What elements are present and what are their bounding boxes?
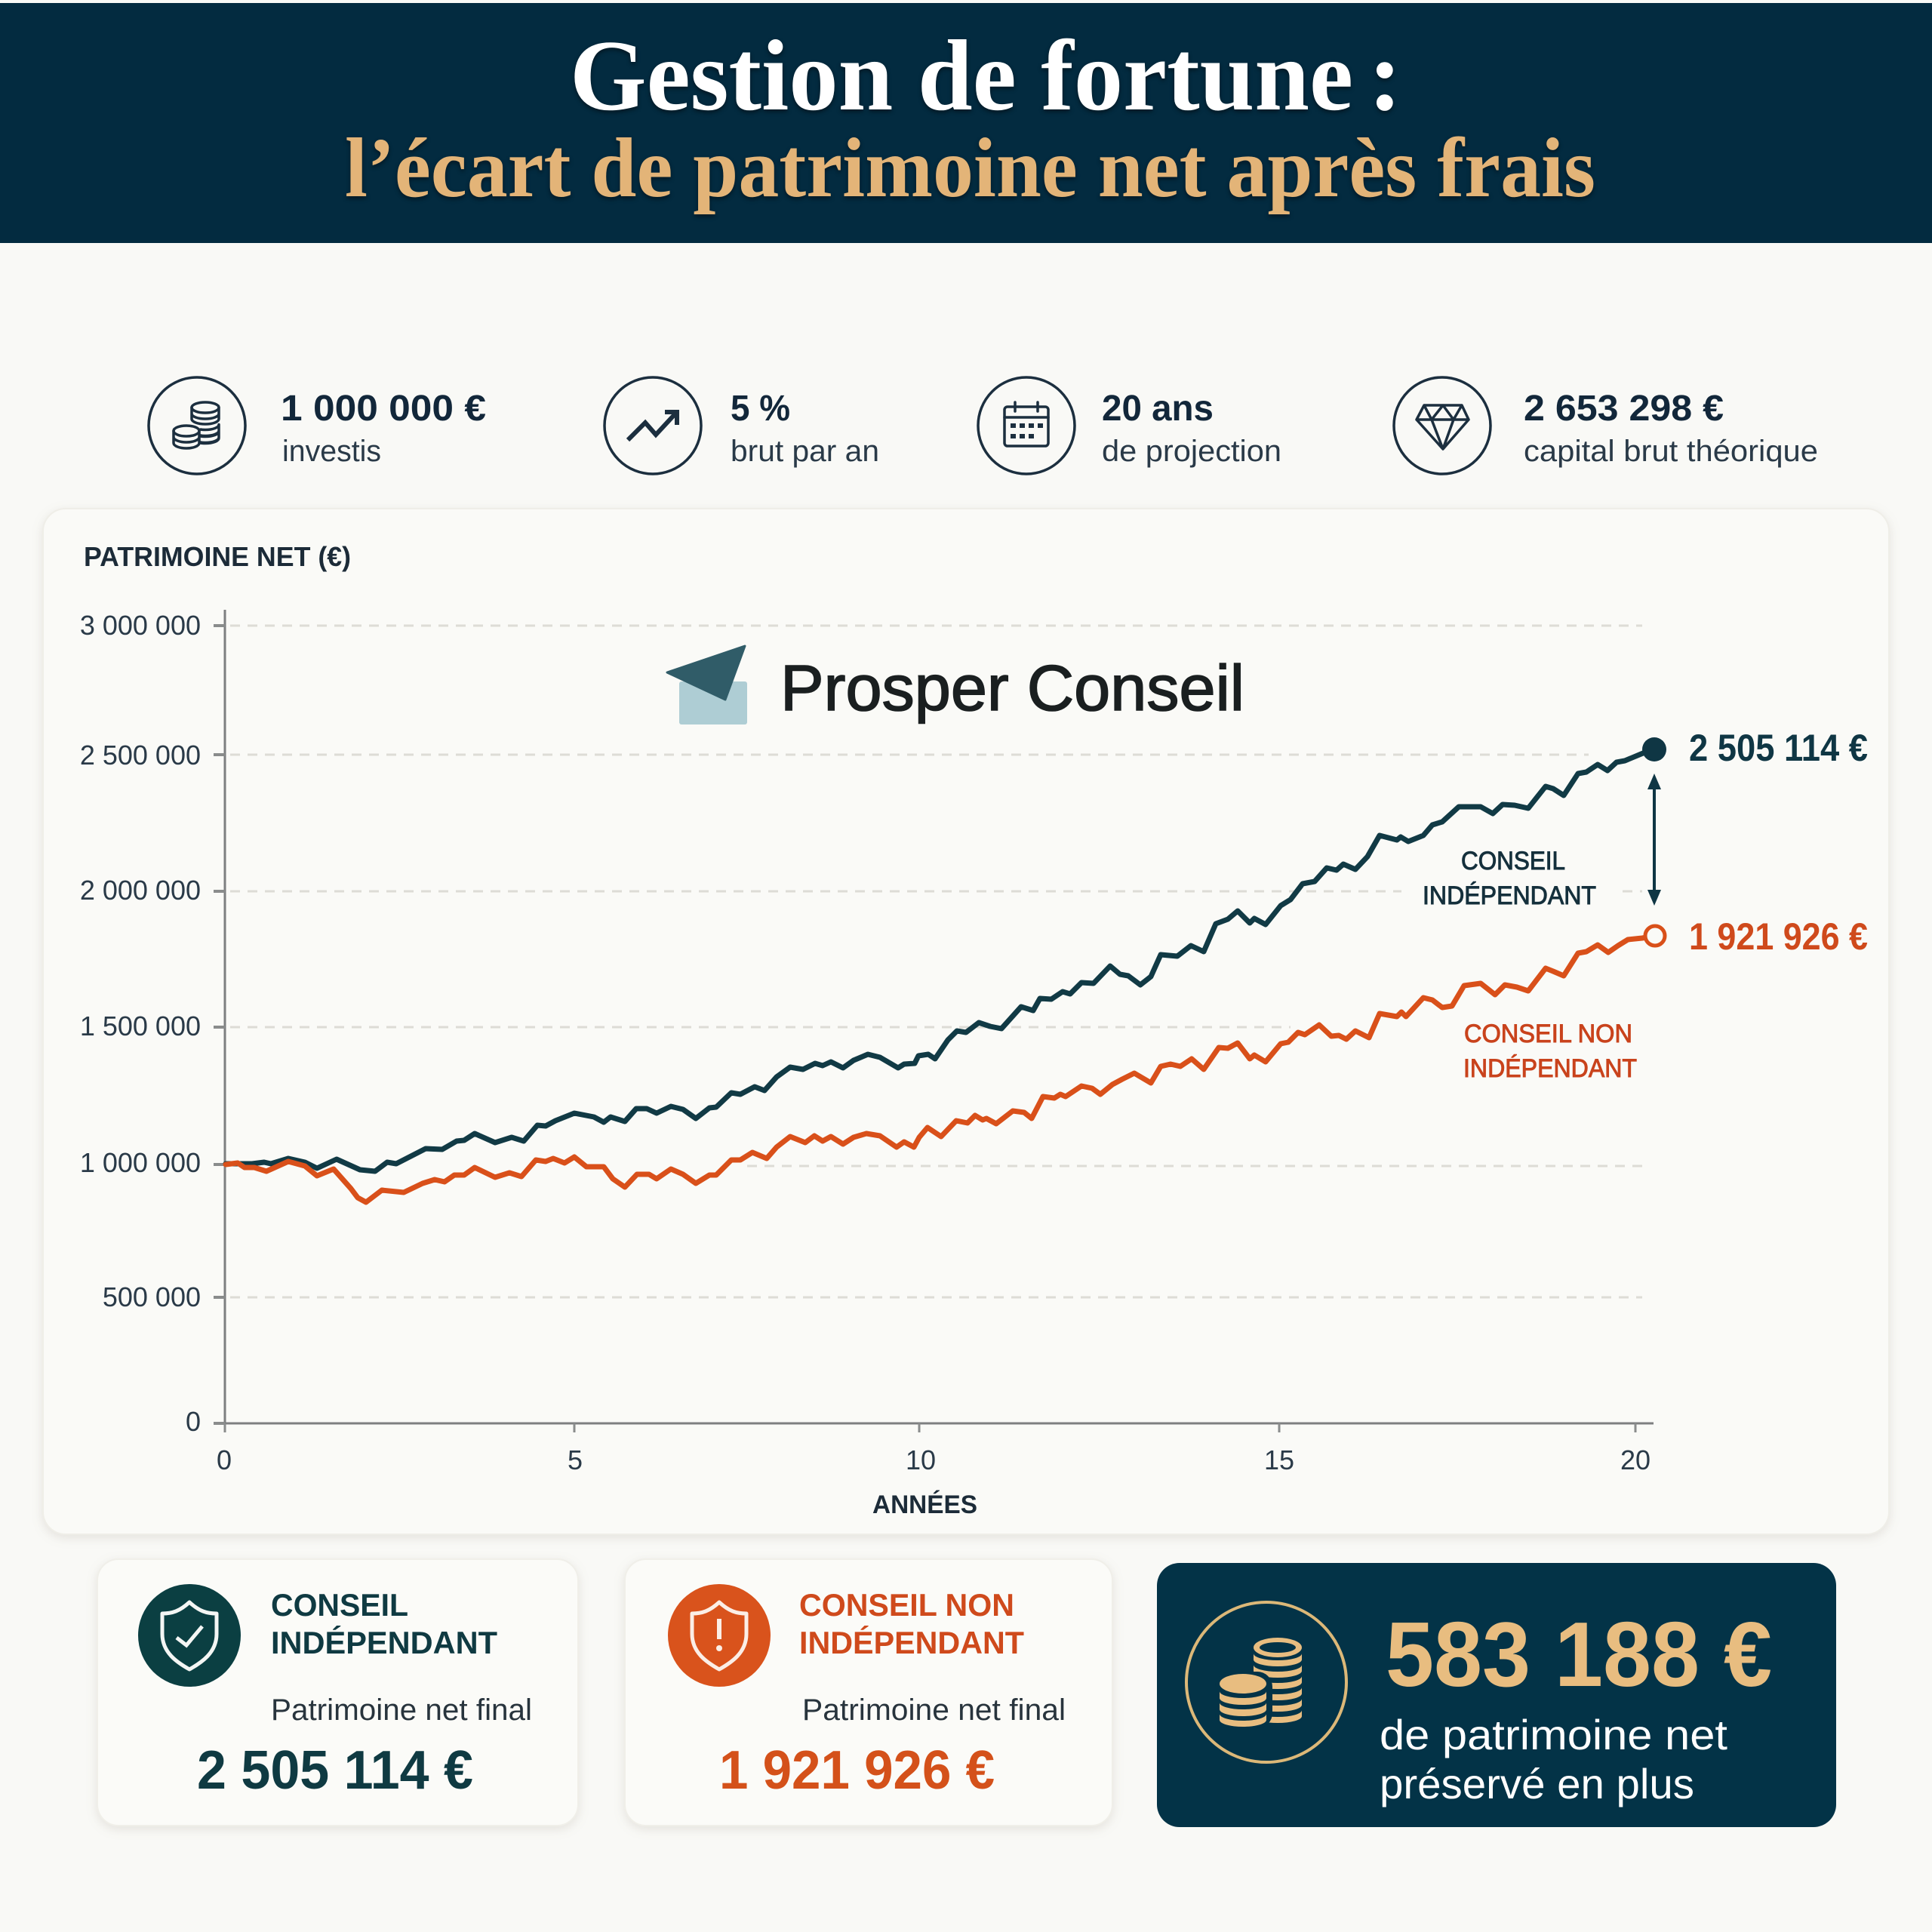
y axis with ticks and labels: 2 500 000 xyxy=(80,740,201,771)
icon: shield with exclamation mark xyxy=(668,1584,771,1687)
x axis title: ANNÉES xyxy=(872,1491,977,1519)
stat: gross return xyxy=(605,377,879,474)
icon: diamond xyxy=(1394,377,1491,474)
card: non-independent advice xyxy=(625,1559,1112,1826)
card heading: CONSEIL NON xyxy=(799,1587,1014,1623)
series label: independent: INDÉPENDANT xyxy=(1423,881,1596,910)
series label: non-independent xyxy=(1463,1020,1637,1083)
caption: brut par an xyxy=(731,435,879,468)
series label: independent xyxy=(1423,847,1596,910)
card heading xyxy=(799,1587,1024,1660)
card heading: INDÉPENDANT xyxy=(799,1625,1024,1660)
card: independent advice xyxy=(97,1559,578,1826)
y axis with ticks and labels: 0 xyxy=(186,1406,201,1437)
callout text: de patrimoine net xyxy=(1380,1711,1727,1758)
y axis title: PATRIMOINE NET (€) xyxy=(84,541,351,572)
icon: gold coins xyxy=(1186,1602,1346,1762)
value: 20 ans xyxy=(1102,389,1214,429)
card heading xyxy=(271,1587,497,1660)
y axis with ticks and labels: 2 000 000 xyxy=(80,875,201,906)
end value: non-independent: 1 921 926 € xyxy=(1689,915,1868,958)
icon: shield with check xyxy=(138,1584,241,1687)
icon: calendar xyxy=(978,377,1075,474)
y axis with ticks and labels xyxy=(80,610,225,1437)
final value: 1 921 926 € xyxy=(719,1740,995,1801)
line: independent advice xyxy=(226,749,1654,1171)
arrow: gap between the two outcomes xyxy=(1647,774,1661,906)
x axis with ticks and labels: 10 xyxy=(906,1444,936,1475)
logo: Prosper Conseil: Prosper Conseil xyxy=(780,653,1244,724)
header banner xyxy=(0,3,1932,243)
x axis with ticks and labels: 5 xyxy=(568,1444,583,1475)
callout text: préservé en plus xyxy=(1380,1760,1694,1807)
end value: independent: 2 505 114 € xyxy=(1689,727,1868,769)
title line 1: Gestion de fortune xyxy=(570,20,1353,131)
end marker: non-independent xyxy=(1645,926,1665,946)
caption: Patrimoine net final xyxy=(271,1694,532,1727)
x axis with ticks and labels xyxy=(217,1423,1654,1519)
stat: amount invested xyxy=(149,377,486,474)
final value: 2 505 114 € xyxy=(197,1740,473,1801)
headline value: 583 188 € xyxy=(1386,1603,1772,1706)
stat: projection duration xyxy=(978,377,1281,474)
y axis with ticks and labels: 3 000 000 xyxy=(80,610,201,641)
icon: coins xyxy=(149,377,245,474)
value: 5 % xyxy=(731,389,790,429)
x axis with ticks and labels: 15 xyxy=(1264,1444,1294,1475)
value: 2 653 298 € xyxy=(1524,389,1724,429)
caption: de projection xyxy=(1102,435,1281,468)
callout text xyxy=(1380,1711,1727,1807)
title line 1: : xyxy=(1368,20,1402,131)
caption: Patrimoine net final xyxy=(802,1694,1066,1727)
card heading: INDÉPENDANT xyxy=(271,1625,497,1660)
line: non-independent advice xyxy=(226,936,1656,1202)
y axis with ticks and labels: 1 000 000 xyxy=(80,1147,201,1178)
series label: non-independent: CONSEIL NON xyxy=(1464,1020,1632,1048)
panel: net wealth chart xyxy=(43,509,1889,1534)
y axis with ticks and labels: 500 000 xyxy=(103,1281,201,1312)
x axis with ticks and labels: 0 xyxy=(217,1444,232,1475)
series label: non-independent: INDÉPENDANT xyxy=(1463,1054,1637,1083)
x axis with ticks and labels: 20 xyxy=(1620,1444,1651,1475)
caption: investis xyxy=(282,435,381,468)
series label: independent: CONSEIL xyxy=(1461,847,1565,875)
caption: capital brut théorique xyxy=(1524,435,1818,468)
value: 1 000 000 € xyxy=(281,389,486,429)
stat: theoretical gross capital xyxy=(1394,377,1818,474)
icon: trend arrow xyxy=(605,377,701,474)
card heading: CONSEIL xyxy=(271,1587,408,1623)
callout: wealth difference xyxy=(1157,1563,1836,1827)
end marker: independent xyxy=(1642,737,1666,761)
y axis with ticks and labels: 1 500 000 xyxy=(80,1011,201,1041)
title line 2: l’écart de patrimoine net après frais xyxy=(345,122,1595,215)
